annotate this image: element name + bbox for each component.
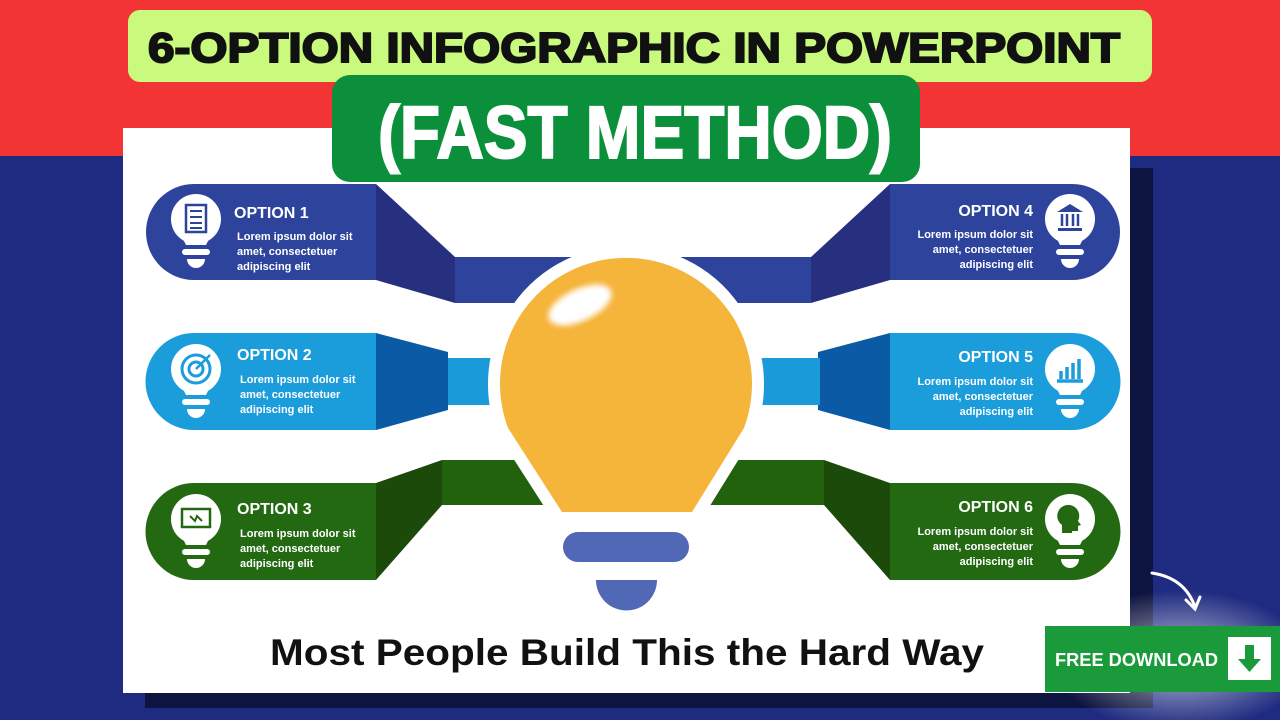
icon: target bulb	[171, 344, 221, 418]
panel: option 1	[146, 184, 575, 303]
panel: option 4	[677, 184, 1120, 303]
panel: option 3	[145, 460, 572, 580]
panel: option 2: OPTION 2	[237, 347, 312, 364]
panel: option 2	[145, 333, 528, 430]
card shadow	[145, 168, 1153, 708]
central bulb	[500, 258, 752, 610]
subtitle pill: (FAST METHOD)	[378, 91, 892, 174]
panel: option 4: amet, consectetuer	[933, 244, 1034, 256]
icon: screen bulb	[171, 494, 221, 568]
panel: option 1: OPTION 1	[234, 205, 309, 222]
panel: option 3: OPTION 3	[237, 501, 312, 518]
panel: option 6: amet, consectetuer	[933, 541, 1034, 553]
free download button	[1045, 626, 1280, 692]
icon: bank bulb	[1045, 194, 1095, 268]
panel: option 5	[730, 333, 1120, 430]
panel: option 2: amet, consectetuer	[240, 389, 341, 401]
panel: option 4: Lorem ipsum dolor sit	[917, 229, 1033, 241]
panel: option 1: Lorem ipsum dolor sit	[237, 231, 353, 243]
icon: head bulb	[1045, 494, 1095, 568]
caption: Most People Build This the Hard Way	[270, 632, 984, 673]
panel: option 2: adipiscing elit	[240, 404, 314, 416]
icon: checklist bulb	[171, 194, 221, 268]
white card	[123, 128, 1130, 693]
icon: chart bulb	[1045, 344, 1095, 418]
panel: option 4: adipiscing elit	[960, 259, 1033, 271]
panel: option 2: Lorem ipsum dolor sit	[240, 374, 356, 386]
panel: option 3: adipiscing elit	[240, 558, 314, 570]
panel: option 6: OPTION 6	[958, 499, 1033, 516]
subtitle pill	[332, 75, 920, 182]
panel: option 5: OPTION 5	[958, 349, 1033, 366]
panel: option 1: amet, consectetuer	[237, 246, 338, 258]
panel: option 1: adipiscing elit	[237, 261, 311, 273]
panel: option 4: OPTION 4	[958, 203, 1033, 220]
panel: option 5: amet, consectetuer	[933, 391, 1034, 403]
panel: option 5: Lorem ipsum dolor sit	[917, 376, 1033, 388]
panel: option 5: adipiscing elit	[960, 406, 1033, 418]
panel: option 6	[690, 460, 1120, 580]
panel: option 3: amet, consectetuer	[240, 543, 341, 555]
glow	[1050, 590, 1280, 720]
panel: option 3: Lorem ipsum dolor sit	[240, 528, 356, 540]
arrow	[1152, 573, 1200, 609]
title banner: 6-OPTION INFOGRAPHIC IN POWERPOINT	[148, 24, 1120, 71]
title banner	[128, 10, 1152, 82]
panel: option 6: adipiscing elit	[960, 556, 1033, 568]
panel: option 6: Lorem ipsum dolor sit	[917, 526, 1033, 538]
free download button: FREE DOWNLOAD	[1055, 650, 1218, 670]
